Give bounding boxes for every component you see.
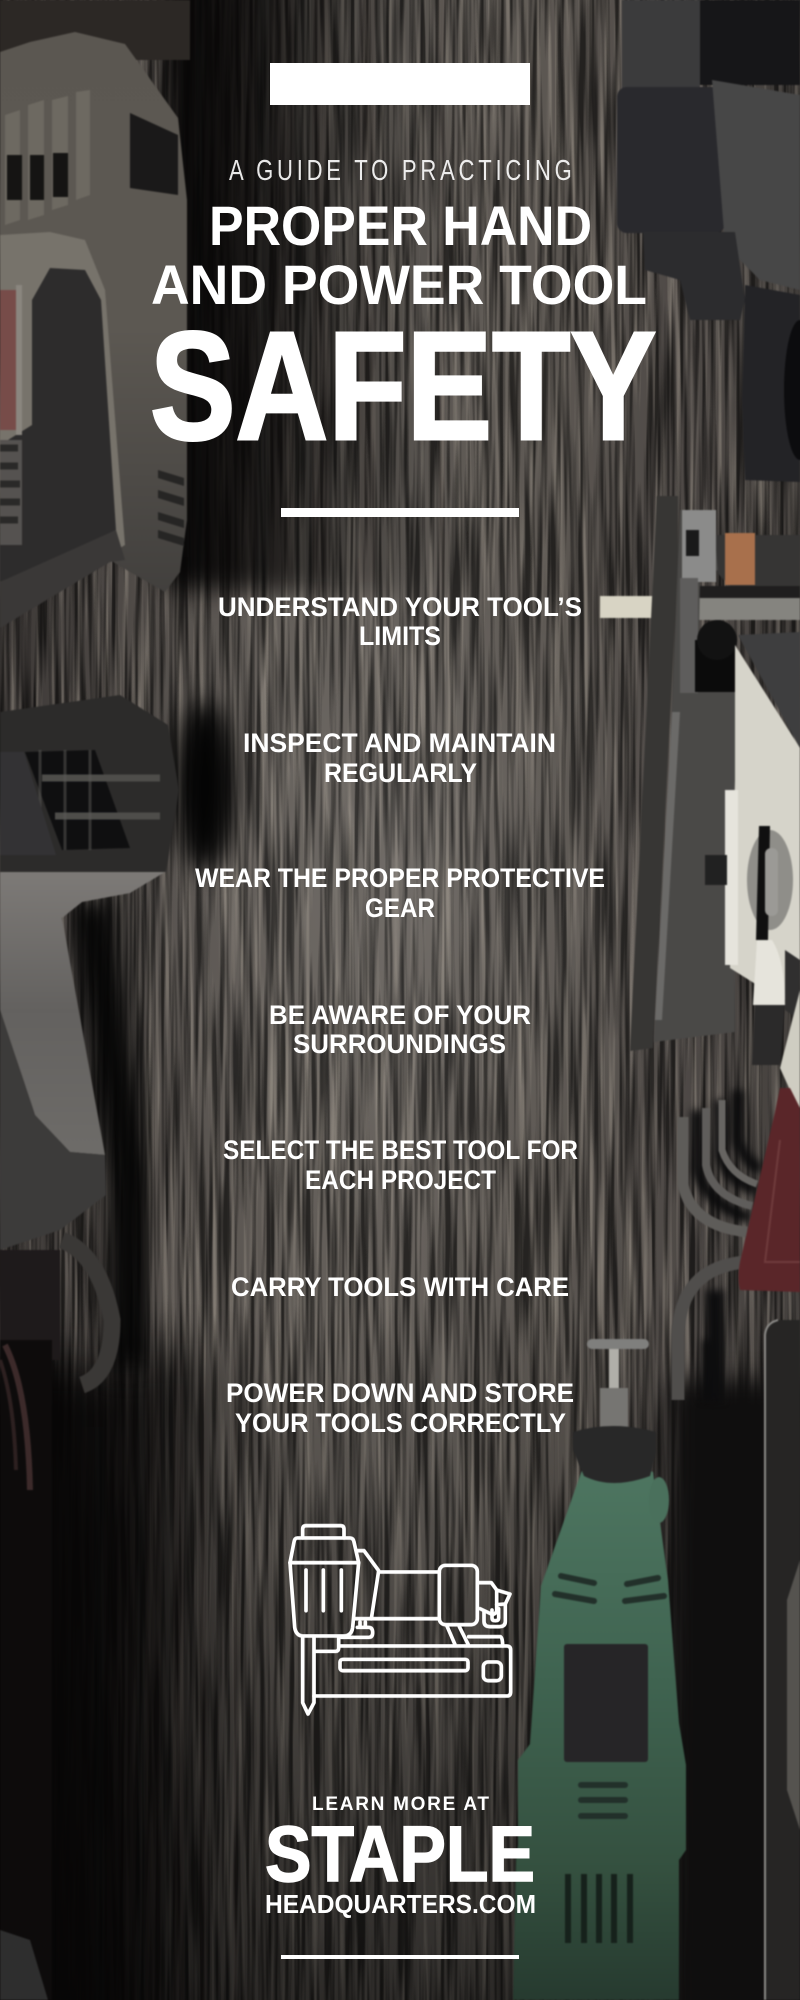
- bottom divider: [281, 1955, 519, 1959]
- bottom grip slots: [568, 1874, 630, 1943]
- tip 5: SELECT THE BEST TOOL FOR: [223, 1135, 578, 1165]
- tip 7: POWER DOWN AND STORE: [226, 1378, 574, 1408]
- tip 3: WEAR THE PROPER PROTECTIVE: [195, 863, 605, 893]
- tool: bottom-right metal frame: [764, 1320, 800, 2000]
- tip 4: [269, 1000, 531, 1059]
- white title bar: [270, 63, 530, 105]
- staple wordmark: STAPLE: [265, 1809, 535, 1898]
- title block: [150, 155, 656, 472]
- tip 4: SURROUNDINGS: [293, 1029, 506, 1059]
- learn more label: LEARN MORE AT: [312, 1794, 489, 1815]
- tip 7: YOUR TOOLS CORRECTLY: [235, 1408, 566, 1438]
- lower vent slots: [581, 1785, 625, 1816]
- tip 3: [195, 863, 605, 923]
- tool: bottom-left dark cable: [0, 1340, 52, 2000]
- tip 6: CARRY TOOLS WITH CARE: [231, 1272, 569, 1302]
- tool: left heat gun: [0, 695, 235, 1385]
- call to action: [265, 1794, 536, 1919]
- domain: HEADQUARTERS.COM: [265, 1889, 536, 1919]
- divider under title: [281, 508, 519, 517]
- tool: red case: [738, 1088, 800, 1292]
- tip 7: [226, 1378, 574, 1438]
- title line two: AND POWER TOOL: [151, 253, 647, 316]
- tip 4: BE AWARE OF YOUR: [269, 1000, 531, 1030]
- icon: nail gun: [290, 1526, 511, 1714]
- tip 2: INSPECT AND MAINTAIN: [243, 728, 556, 758]
- tool: green rotary tool: [513, 1339, 686, 2000]
- tip 3: GEAR: [365, 893, 435, 923]
- title line one: PROPER HAND: [209, 194, 592, 257]
- upper vent slots: [555, 1576, 664, 1601]
- tip 5: [223, 1135, 578, 1195]
- tip 1: UNDERSTAND YOUR TOOL’S: [218, 592, 582, 622]
- main word: SAFETY: [150, 300, 656, 472]
- rotary bit and chuck: [587, 1339, 649, 1430]
- tip 1: [218, 592, 582, 651]
- tip 1: LIMITS: [359, 621, 441, 651]
- tip 2: [243, 728, 556, 788]
- tool: right jigsaw: [600, 496, 800, 1112]
- tip 5: EACH PROJECT: [305, 1165, 496, 1195]
- tip 2: REGULARLY: [324, 758, 477, 788]
- saw blade: [600, 586, 800, 620]
- tool: top-left drill: [0, 0, 190, 628]
- tool: hex keys: [678, 1090, 760, 1400]
- tool: top-right sander: [617, 0, 800, 482]
- list of safety tips: [195, 592, 605, 1438]
- kicker: A GUIDE TO PRACTICING: [229, 155, 572, 187]
